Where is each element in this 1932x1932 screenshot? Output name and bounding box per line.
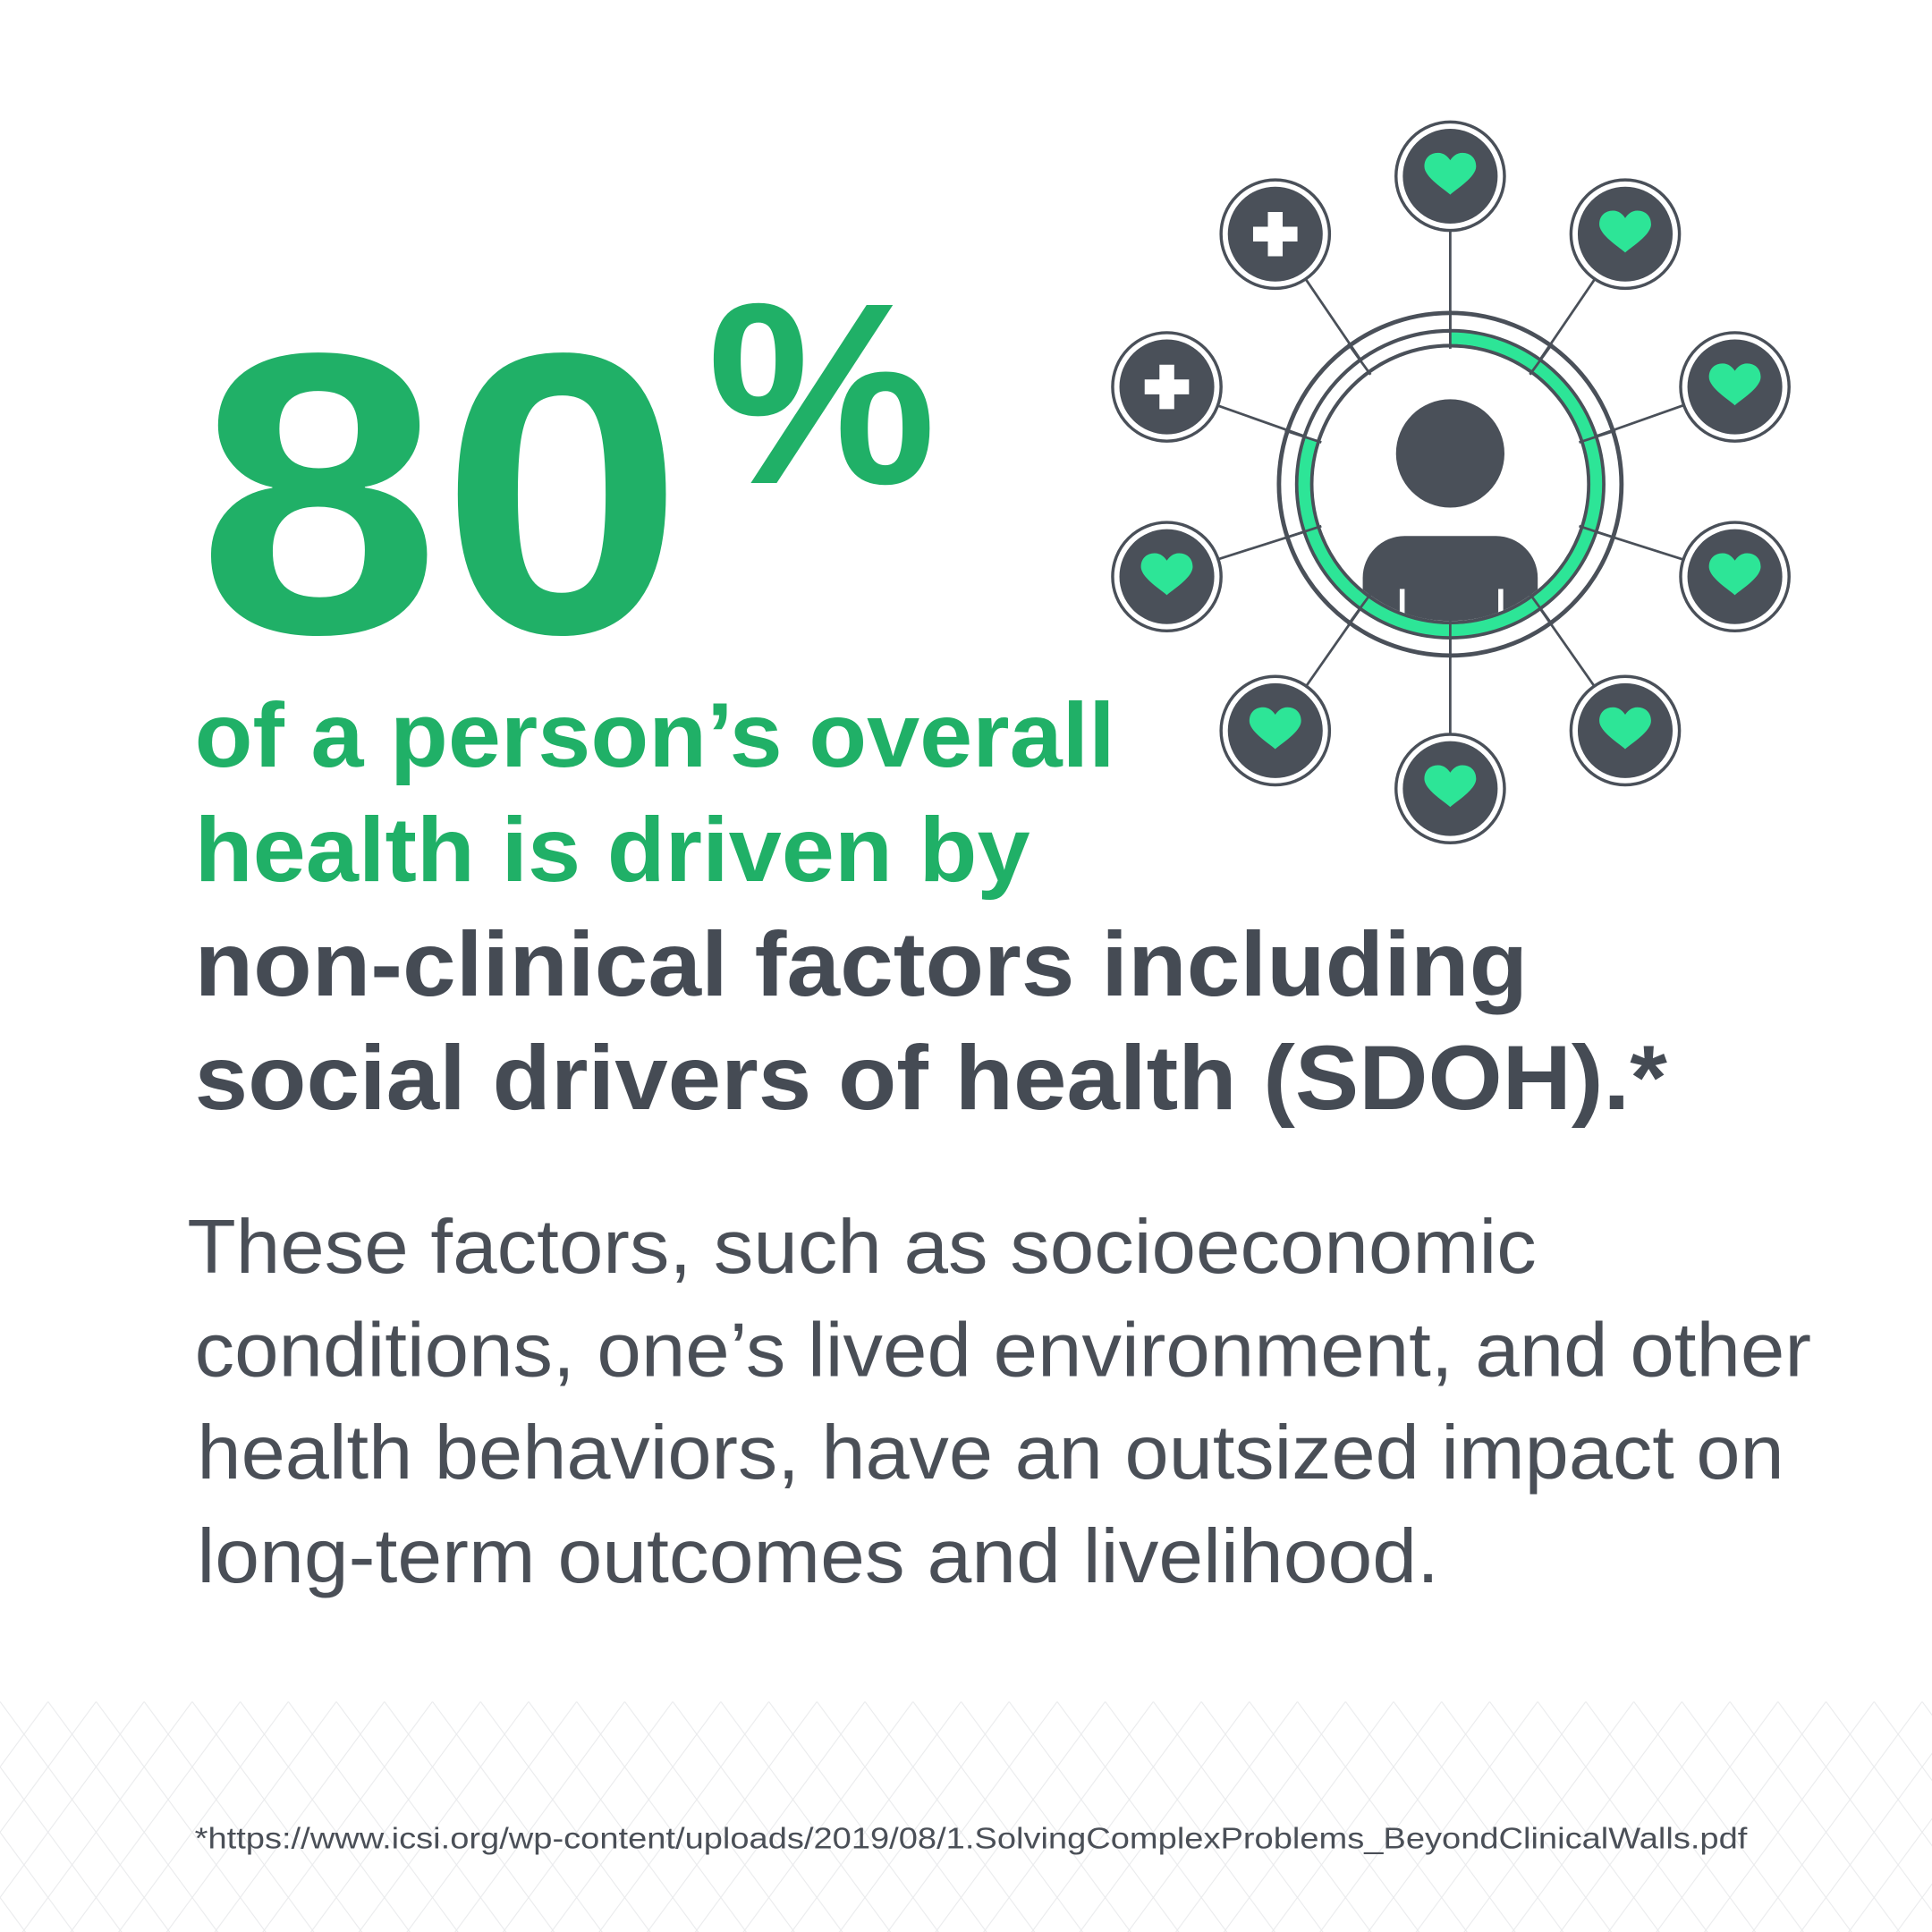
diagram: person network: [1113, 122, 1789, 843]
headline dark: [195, 913, 1667, 1129]
progress ring: [1304, 338, 1597, 631]
headline green: [195, 684, 1115, 901]
headline green: health is driven by: [195, 799, 1030, 901]
body paragraph: [187, 1205, 1811, 1599]
body paragraph: conditions, one’s lived environment, and other: [195, 1309, 1811, 1394]
big stat: 80%: 80: [197, 270, 684, 717]
headline green: of a person’s overall: [195, 684, 1115, 786]
ring ticks: [1285, 310, 1615, 658]
headline dark: social drivers of health (SDOH).*: [195, 1027, 1667, 1129]
big stat: 80%: %: [708, 250, 936, 538]
satellites: [1113, 122, 1789, 843]
headline dark: non-clinical factors including: [195, 913, 1528, 1015]
body paragraph: These factors, such as socioeconomic: [187, 1205, 1537, 1290]
background pattern: [0, 1701, 1932, 1932]
big stat: 80%: [197, 250, 936, 717]
footnote: *https://www.icsi.org/wp-content/uploads/2019/08/1.SolvingComplexProblems_BeyondClinicalWalls.pdf: [195, 1822, 1748, 1855]
body paragraph: long-term outcomes and livelihood.: [197, 1514, 1439, 1599]
spokes: [1214, 228, 1687, 737]
body paragraph: health behaviors, have an outsized impact on: [197, 1411, 1784, 1496]
outer ring: [1279, 313, 1622, 656]
icon: person: [1363, 399, 1538, 621]
